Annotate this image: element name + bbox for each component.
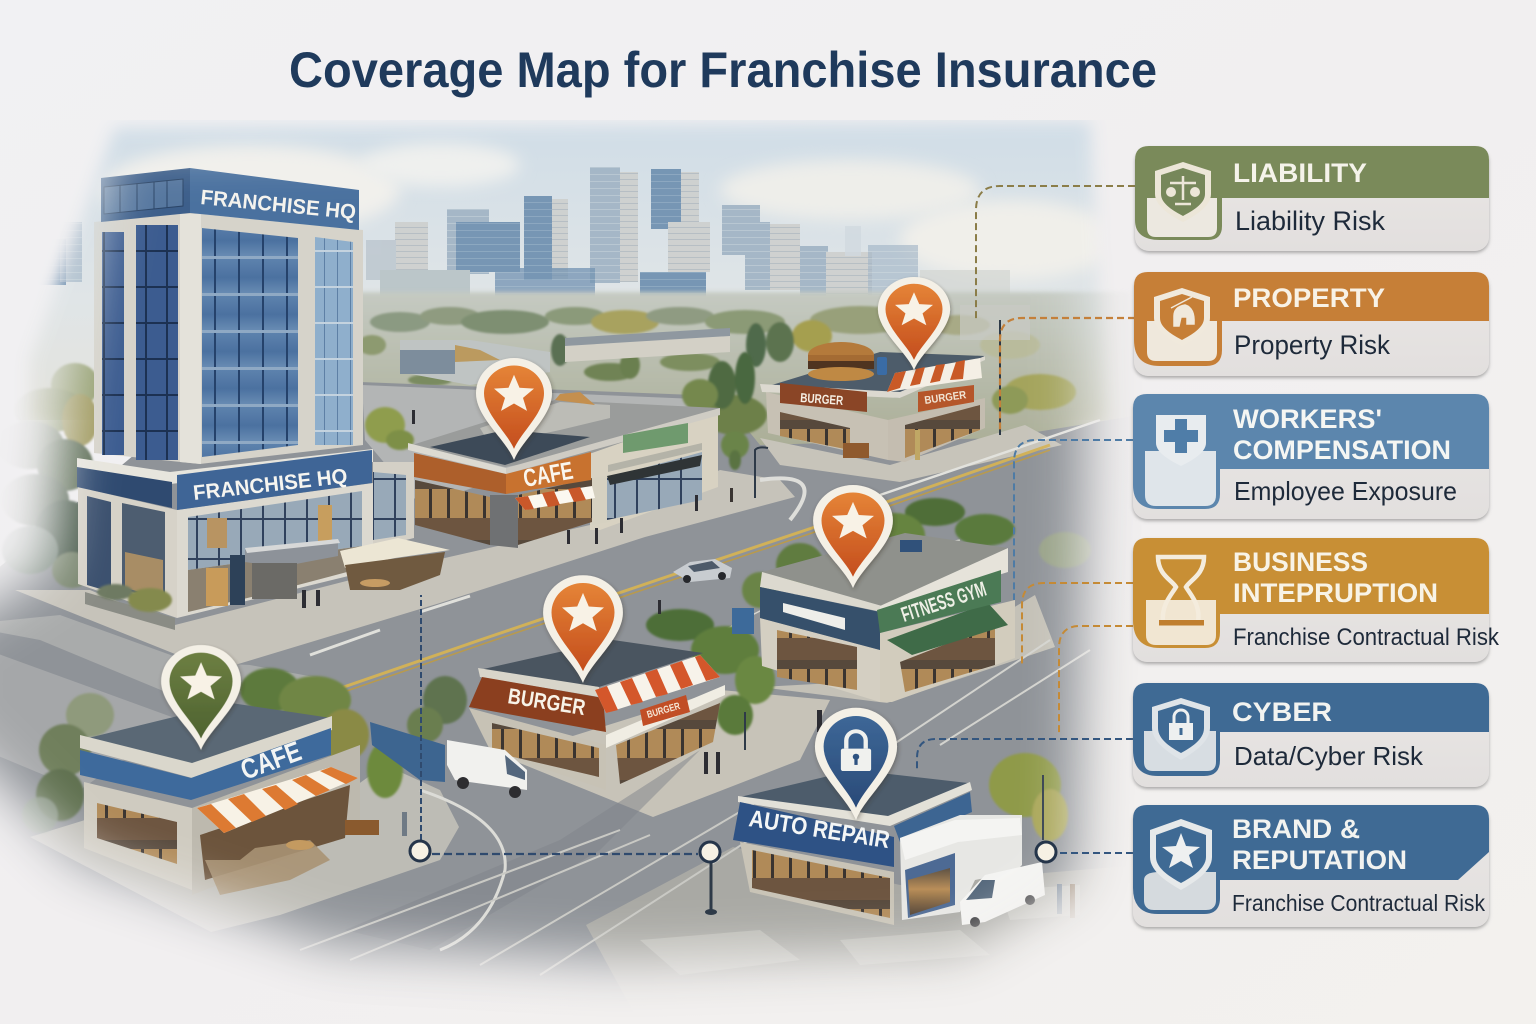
pin: Auto Repair with padlock <box>815 708 897 820</box>
lower cafe sidewalk <box>30 765 459 932</box>
connector: workers compensation line <box>1014 440 1133 600</box>
pin: Fitness Gym <box>813 485 893 588</box>
building sign: Cafe blue <box>191 728 331 800</box>
heading: Business Intepruption: INTEPRUPTION <box>1233 578 1438 608</box>
planter <box>85 592 175 630</box>
building sign: podium Franchise HQ <box>177 450 372 510</box>
sign: green store sign <box>623 423 688 453</box>
heading: Brand and Reputation: BRAND & <box>1232 814 1360 844</box>
behind lower burger <box>646 609 714 641</box>
patio umbrellas <box>340 538 450 568</box>
panel: liability card <box>1135 146 1489 251</box>
building sign: Fitness Gym: FITNESS GYM <box>898 578 989 627</box>
building: Burger, upper row <box>760 342 985 462</box>
building sign: Fitness Gym <box>877 570 1001 633</box>
awning: burger front stripes <box>595 655 720 713</box>
map scene: city illustration <box>0 120 1200 1024</box>
building sign: Burger front <box>469 677 606 732</box>
annex garage <box>900 815 1022 920</box>
panel: cyber card <box>1133 683 1489 787</box>
street lamps and signs <box>745 320 1043 840</box>
label: Employee Exposure: Employee Exposure <box>1234 476 1457 506</box>
building sign: top Franchise HQ: FRANCHISE HQ <box>200 186 357 224</box>
auto repair right <box>989 753 1061 817</box>
panel: workers' compensation card <box>1133 394 1489 519</box>
label: Property Risk: Property Risk <box>1234 330 1390 360</box>
building sign: podium Franchise HQ: FRANCHISE HQ <box>192 465 349 505</box>
heading: Brand and Reputation: REPUTATION <box>1232 845 1407 875</box>
upper burger sidewalk <box>760 425 1062 482</box>
vehicle: delivery vans <box>370 722 527 798</box>
icon: shield with cross <box>1156 415 1206 466</box>
auto repair plaza <box>586 847 1082 972</box>
icon: hourglass base <box>1159 620 1204 626</box>
pin: Burger upper <box>878 277 950 370</box>
behind fitness gym <box>905 498 965 526</box>
ground and roads <box>0 382 1120 994</box>
lower burger sidewalk <box>500 690 830 817</box>
panel: brand and reputation card <box>1133 805 1489 927</box>
building: Burger, lower row <box>469 640 725 790</box>
building sign: top Franchise HQ <box>101 168 359 230</box>
panel: business interruption card <box>1133 538 1500 662</box>
building sign: Auto Repair: AUTO REPAIR <box>747 805 892 854</box>
yellow center line <box>335 445 1050 690</box>
connector: liability line <box>976 186 1135 320</box>
icon: hourglass <box>1158 557 1204 622</box>
connector: map vertical line <box>420 595 422 840</box>
panel: property card <box>1134 272 1489 376</box>
connector: business interruption lower line <box>1059 626 1133 735</box>
building: Cafe, lower row <box>80 703 379 895</box>
heading: Liability: LIABILITY <box>1233 158 1367 188</box>
heading: Cyber: CYBER <box>1232 697 1332 727</box>
building sign: Burger: BURGER <box>800 390 844 408</box>
awning: cafe stripes <box>515 486 595 510</box>
connector: cyber line <box>917 739 1133 770</box>
icon: shield with figure <box>1154 288 1210 346</box>
entrance canopy <box>245 543 338 564</box>
awning: cafe stripes lower <box>197 767 358 833</box>
connector: property line <box>1000 318 1135 432</box>
heading: Brand and Reputation <box>1232 814 1407 875</box>
building: Burger, upper row: BURGER <box>924 389 967 407</box>
heading: Workers' Compensation: COMPENSATION <box>1233 435 1451 465</box>
node: left junction <box>410 841 430 861</box>
label: Data/Cyber Risk: Data/Cyber Risk <box>1234 741 1424 771</box>
title: Coverage Map for Franchise Insurance <box>289 42 1157 98</box>
lane marks <box>310 596 470 655</box>
upper right of HQ <box>365 407 405 443</box>
awning: burger stripes <box>887 358 982 392</box>
building: Auto Repair <box>733 770 1022 925</box>
left of headquarters <box>50 362 94 401</box>
heading: Workers' Compensation <box>1233 404 1451 465</box>
node: center junction with post <box>700 842 720 915</box>
skyline backdrop <box>0 120 1140 420</box>
label: Liability Risk: Liability Risk <box>1235 206 1385 236</box>
vehicle: silver car <box>673 559 732 583</box>
heading: Business Intepruption <box>1233 547 1438 608</box>
building sign: Cafe blue: CAFE <box>236 735 305 786</box>
behind upper burger <box>703 395 767 435</box>
illustration: giant burger on roof <box>808 342 887 381</box>
pin: Burger lower <box>543 575 623 683</box>
building sign: Auto Repair <box>733 802 894 867</box>
node: right junction <box>1036 842 1056 862</box>
awning: gym <box>887 603 1008 655</box>
icon: shield with star <box>1150 819 1212 890</box>
mid-ground trees and low buildings <box>363 290 1118 445</box>
building sign: Burger front: BURGER <box>506 683 587 720</box>
icon: shield with padlock <box>1152 698 1210 760</box>
building: Burger, lower row: BURGER <box>646 701 682 721</box>
heading: Property: PROPERTY <box>1233 283 1385 313</box>
people on sidewalks <box>302 410 1075 918</box>
building sign: Burger <box>780 383 867 412</box>
building: Fitness Gym <box>732 533 1015 702</box>
building: Franchise HQ tower <box>94 168 363 464</box>
pin: Cafe lower green <box>161 645 241 750</box>
heading: Business Intepruption: BUSINESS <box>1233 547 1368 577</box>
label: Franchise Contractual Risk: Franchise Contractual Risk <box>1232 890 1485 916</box>
building sign: Cafe orange: CAFE <box>521 457 575 493</box>
trees around the scene <box>0 352 1091 841</box>
sidewalk planter and podium of headquarters <box>77 449 450 630</box>
HQ and cafe sidewalk <box>15 470 795 665</box>
lower cafe <box>240 668 300 712</box>
icon: shield with scales <box>1155 162 1211 222</box>
heading: Workers' Compensation: WORKERS' <box>1233 404 1382 434</box>
label: Franchise Contractual Risk: Franchise Contractual Risk <box>1233 624 1500 651</box>
pin: Cafe upper <box>476 358 552 460</box>
vehicle: white van by auto repair <box>960 862 1045 927</box>
connector: business interruption upper line <box>1022 583 1133 665</box>
connector: map horizontal line <box>432 853 698 855</box>
building: Cafe, upper row <box>408 392 720 548</box>
connector: brand line <box>1058 852 1133 854</box>
gym sidewalk <box>760 595 1055 703</box>
